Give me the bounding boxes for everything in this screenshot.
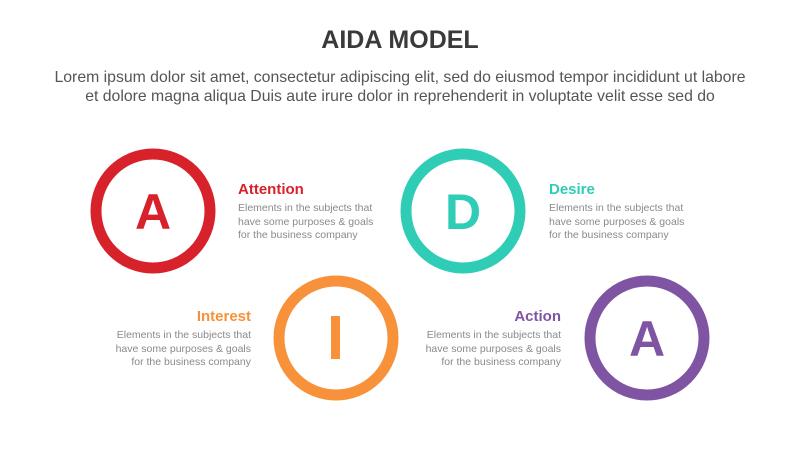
circle: A action: A bbox=[629, 311, 665, 367]
text: interest bbox=[116, 308, 251, 368]
subtitle text: Lorem ipsum dolor sit amet, consectetur adipiscing elit, sed do eiusmod tempor incididunt ut labore bbox=[54, 69, 746, 86]
circle: D desire: D bbox=[445, 184, 481, 240]
circle: A attention: A bbox=[135, 184, 171, 240]
text: desire: Elements in the subjects that bbox=[549, 202, 683, 214]
text: attention: Elements in the subjects that bbox=[238, 202, 372, 214]
circle: A attention bbox=[96, 154, 210, 268]
circle: I interest bbox=[279, 281, 393, 395]
text: attention: for the business company bbox=[238, 229, 358, 241]
text: desire: have some purposes & goals bbox=[549, 216, 684, 228]
text: desire bbox=[549, 181, 684, 241]
text: action: have some purposes & goals bbox=[426, 342, 561, 354]
text: interest: have some purposes & goals bbox=[116, 342, 251, 354]
text: desire: Desire bbox=[549, 181, 595, 198]
subtitle text: et dolore magna aliqua Duis aute irure dolor in reprehenderit in voluptate velit esse sed do bbox=[85, 88, 715, 105]
text: attention: have some purposes & goals bbox=[238, 216, 373, 228]
text: attention: Attention bbox=[238, 181, 304, 198]
text: action: Elements in the subjects that bbox=[427, 329, 561, 341]
text: action bbox=[426, 308, 561, 368]
text: action: Action bbox=[514, 308, 561, 325]
text: interest: Interest bbox=[197, 308, 251, 325]
circle: D desire bbox=[406, 154, 520, 268]
circle: A action bbox=[590, 281, 704, 395]
text: interest: Elements in the subjects that bbox=[117, 329, 251, 341]
text: action: for the business company bbox=[441, 356, 561, 368]
title: AIDA MODEL bbox=[321, 26, 479, 54]
text: interest: for the business company bbox=[131, 356, 251, 368]
text: attention bbox=[238, 181, 373, 241]
subtitle text bbox=[54, 69, 746, 105]
text: desire: for the business company bbox=[549, 229, 669, 241]
